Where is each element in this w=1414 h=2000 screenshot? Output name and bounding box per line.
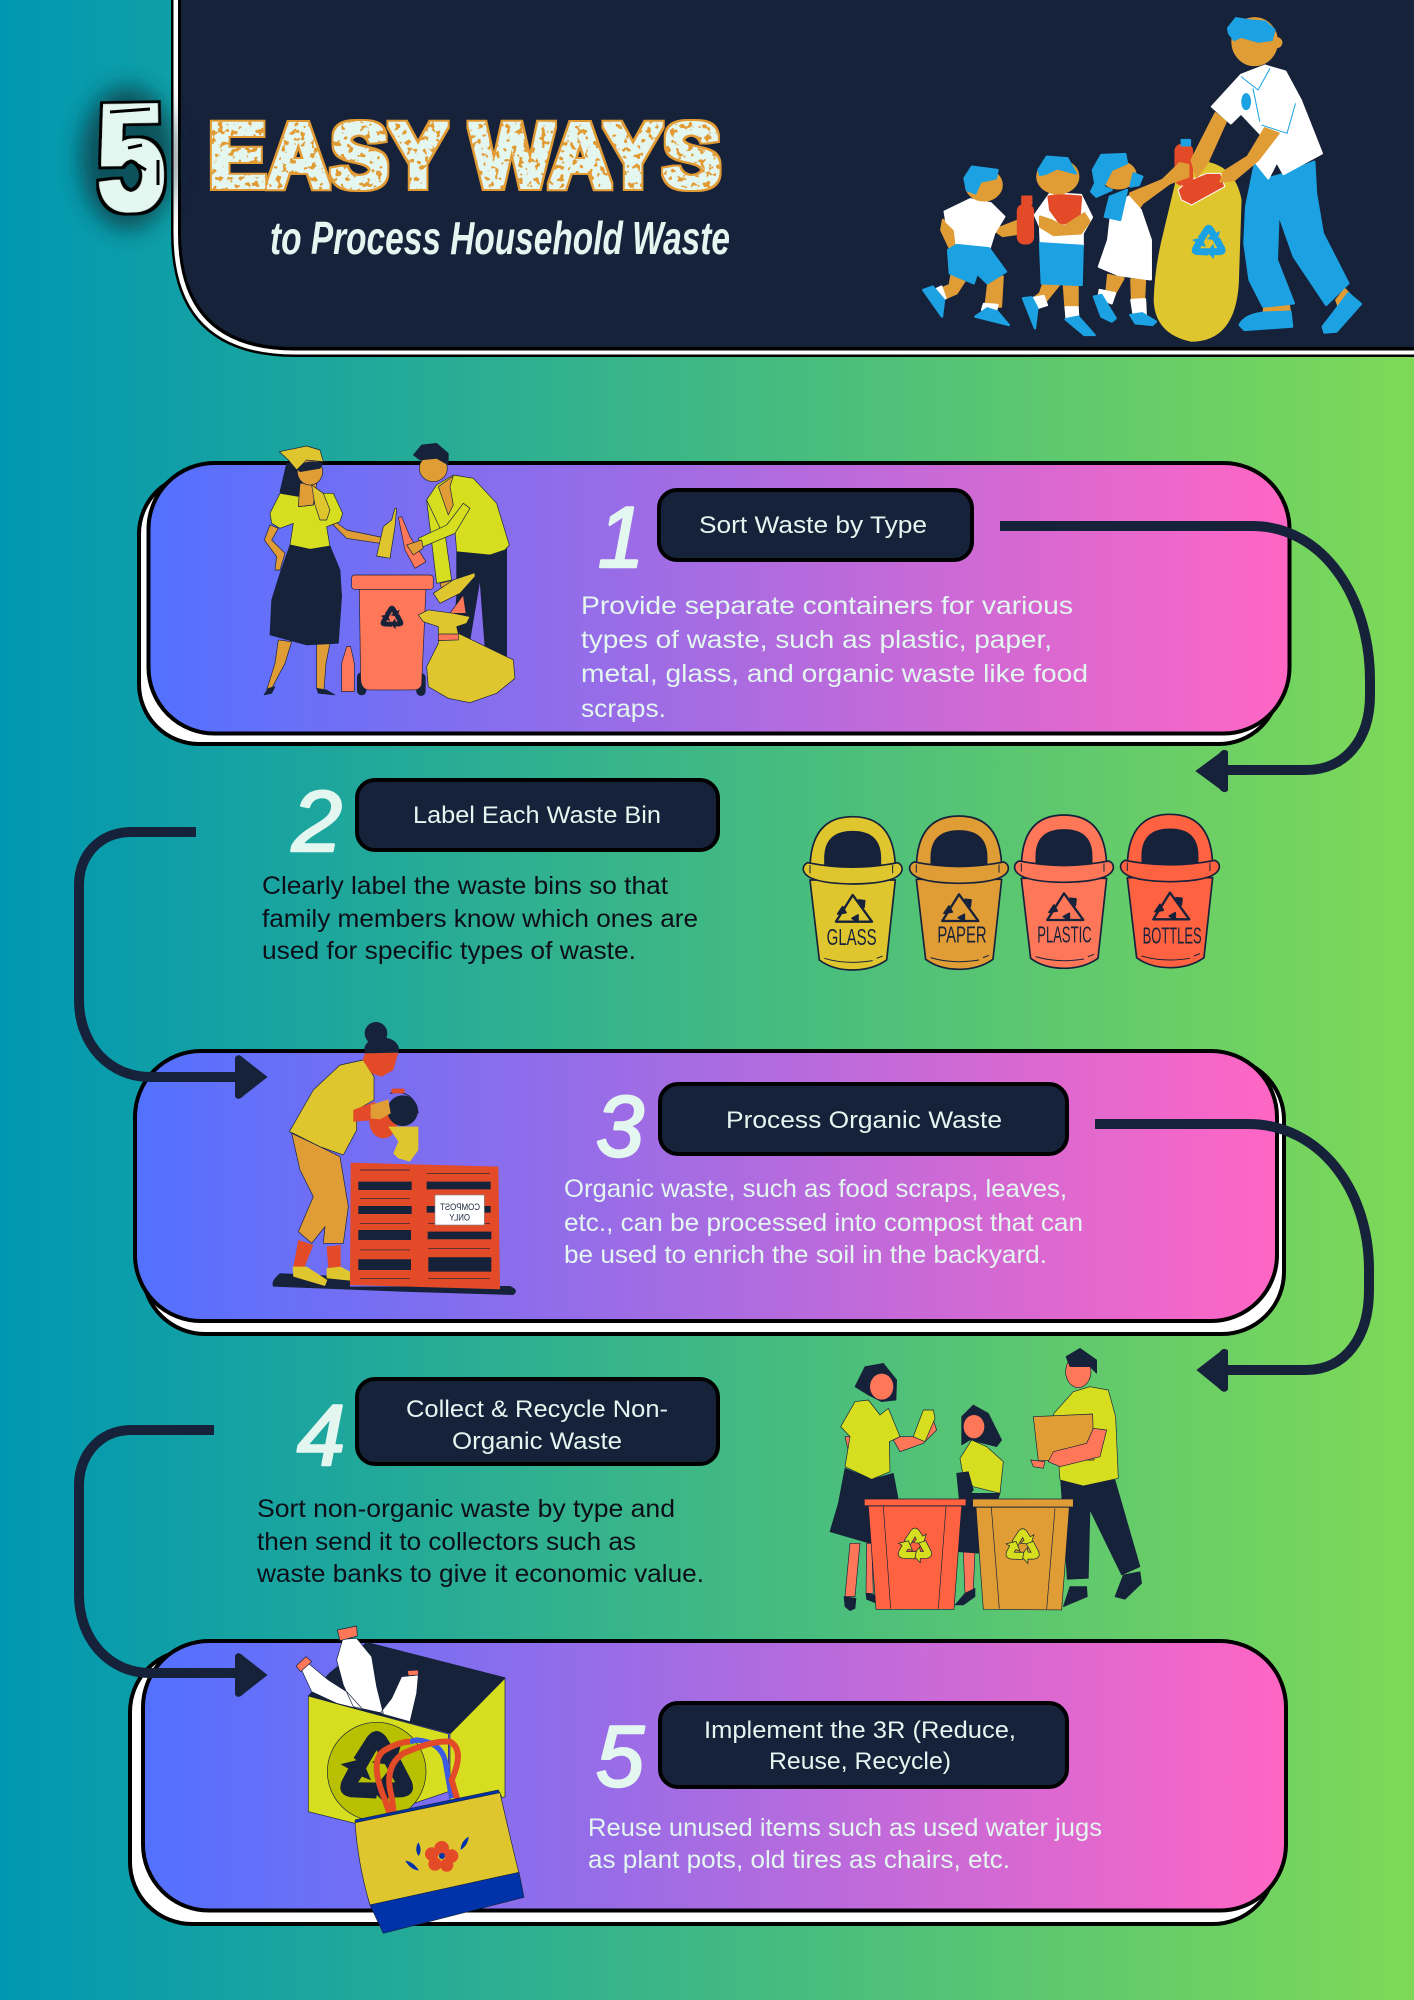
number 3: 3	[596, 1079, 644, 1175]
title: easy ways: EASY WAYS	[208, 105, 721, 207]
body text 3: etc., can be processed into compost that can	[564, 1209, 1083, 1237]
illustration: four labelled waste bins: BOTTLES	[1143, 922, 1202, 948]
big number 5 in title: 5	[95, 72, 166, 242]
button: implement the 3R	[660, 1703, 1067, 1787]
panel 3: process organic	[135, 1051, 1284, 1334]
body text 3	[564, 1175, 1083, 1269]
panel 5: implement 3R	[130, 1641, 1286, 1924]
body text 1: Provide separate containers for various	[581, 592, 1073, 620]
button: sort waste by type	[659, 490, 972, 560]
button: collect and recycle: Collect & Recycle Non-	[406, 1396, 668, 1423]
body text 5: as plant pots, old tires as chairs, etc.	[588, 1846, 1010, 1874]
illustration: woman composting	[272, 1022, 516, 1295]
button: implement the 3R: Reuse, Recycle)	[769, 1748, 951, 1775]
button: process organic waste	[660, 1084, 1067, 1154]
illustration: woman composting: ONLY	[449, 1213, 470, 1223]
button: label each waste bin	[357, 780, 718, 850]
body text 4	[256, 1495, 704, 1588]
arrow 1	[1000, 526, 1370, 791]
number 5: 5	[596, 1709, 645, 1805]
body text 3: Organic waste, such as food scraps, leaves,	[564, 1175, 1067, 1203]
body text 4: then send it to collectors such as	[257, 1528, 636, 1556]
illustration: four labelled waste bins: GLASS	[827, 924, 877, 950]
arrow 3	[1095, 1124, 1369, 1391]
number 2: 2	[291, 774, 342, 870]
illustration: woman composting: COMPOST	[440, 1202, 480, 1212]
number 4: 4	[297, 1388, 345, 1484]
body text 1: metal, glass, and organic waste like food	[581, 660, 1088, 688]
button: implement the 3R: Implement the 3R (Reduce,	[704, 1717, 1016, 1744]
panel 1: sort waste	[139, 463, 1290, 744]
body text 3: be used to enrich the soil in the backyard.	[564, 1241, 1047, 1269]
illustration: recycling box with bottles and tote bag	[296, 1626, 524, 1933]
body text 1: scraps.	[581, 695, 666, 723]
illustration: four labelled waste bins: PLASTIC	[1037, 922, 1092, 948]
button: label each waste bin: Label Each Waste Bin	[413, 802, 661, 829]
illustration: couple sorting bottles into bin	[264, 443, 515, 703]
body text 1	[581, 592, 1088, 723]
body text 4: Sort non-organic waste by type and	[257, 1495, 675, 1523]
body text 2: used for specific types of waste.	[262, 937, 636, 965]
header banner	[171, 0, 1414, 357]
illustration: family with recycling bins	[830, 1348, 1142, 1611]
body text 5	[588, 1814, 1102, 1874]
button: process organic waste: Process Organic Waste	[726, 1107, 1002, 1134]
body text 5: Reuse unused items such as used water jugs	[588, 1814, 1102, 1842]
body text 2	[262, 872, 698, 965]
body text 4: waste banks to give it economic value.	[256, 1560, 704, 1588]
button: collect and recycle: Organic Waste	[452, 1428, 622, 1455]
subtitle: to Process Household Waste	[270, 212, 730, 264]
illustration: four labelled waste bins: PAPER	[937, 922, 987, 948]
illustration: four labelled waste bins	[803, 814, 1219, 970]
number 1: 1	[598, 490, 644, 586]
illustration: family collecting bottles	[923, 18, 1361, 341]
body text 2: family members know which ones are	[262, 905, 698, 933]
body text 2: Clearly label the waste bins so that	[262, 872, 668, 900]
button: collect and recycle	[357, 1379, 718, 1464]
body text 1: types of waste, such as plastic, paper,	[581, 626, 1052, 654]
button: sort waste by type: Sort Waste by Type	[699, 512, 927, 539]
arrow 2	[79, 832, 266, 1098]
arrow 4	[79, 1430, 266, 1696]
